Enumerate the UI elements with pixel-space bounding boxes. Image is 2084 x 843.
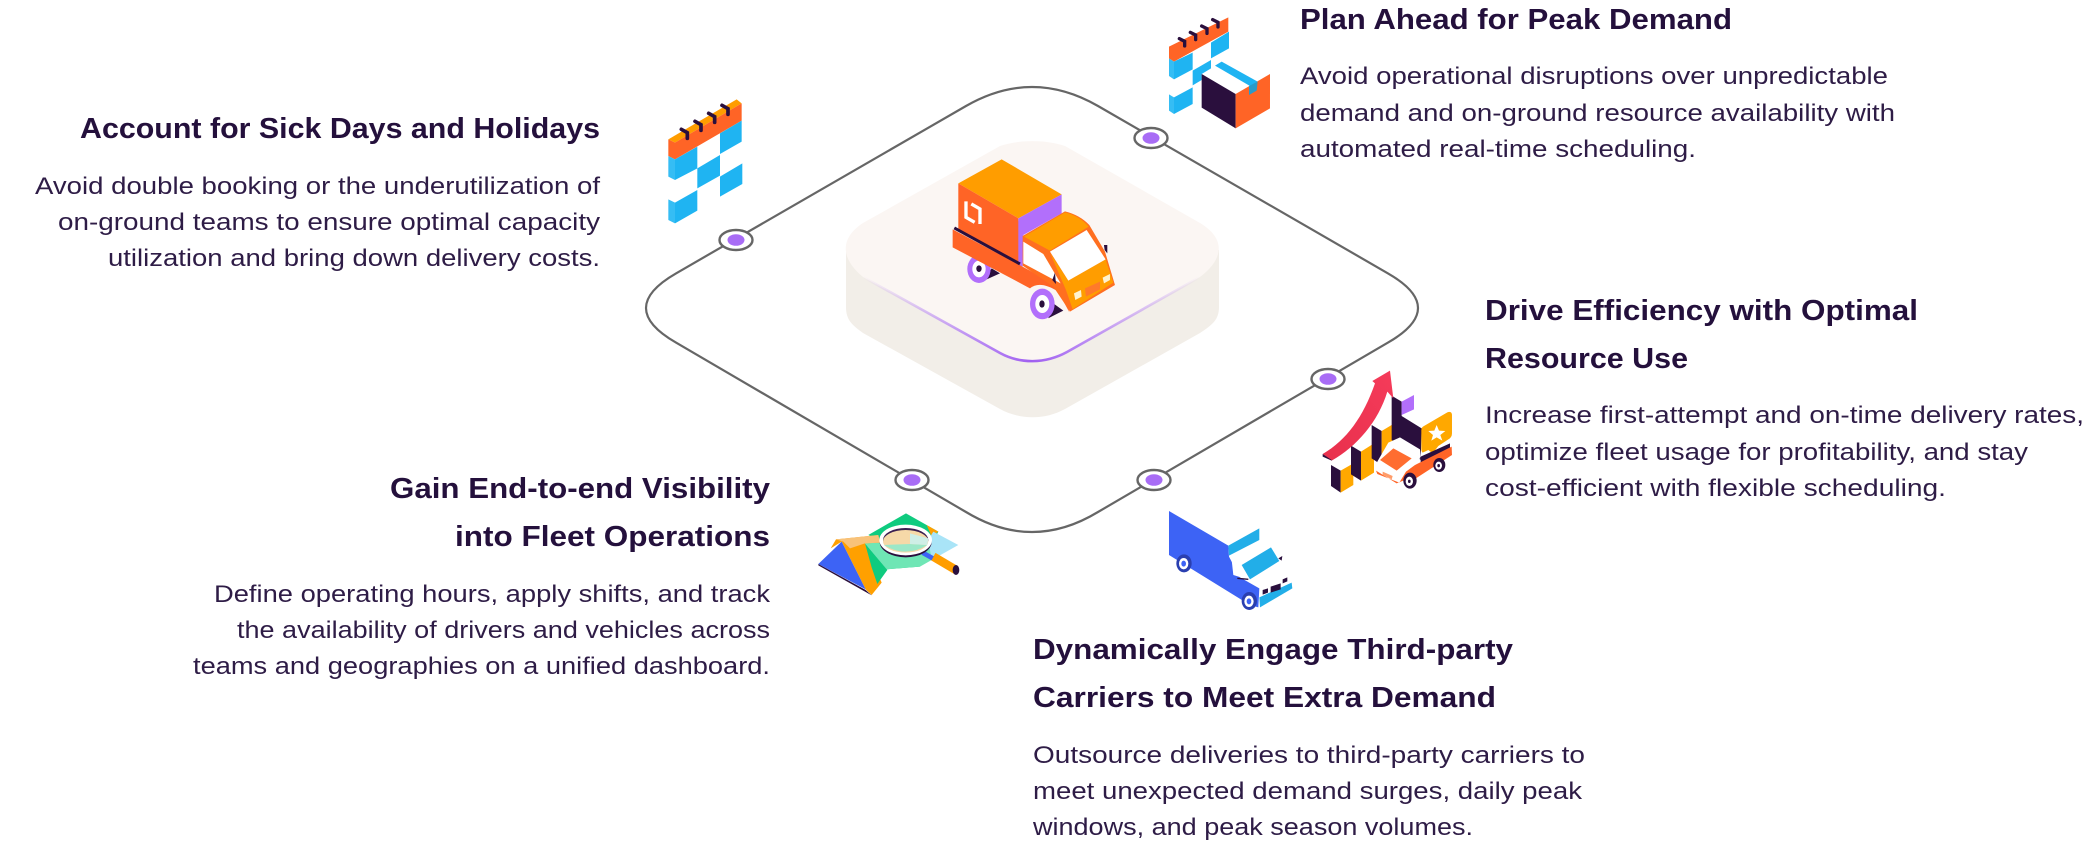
- body: optimize fleet usage for profitability, and stay: [1485, 439, 2029, 466]
- body: [193, 581, 771, 680]
- heading: [390, 473, 770, 553]
- icon: calendar and parcel: [1169, 17, 1270, 128]
- text block: Drive Efficiency with Optimal Resource Use: [1485, 295, 2084, 502]
- text block: Gain End-to-end Visibility into Fleet Operations: [193, 473, 771, 680]
- body: Avoid operational disruptions over unpredictable: [1300, 63, 1888, 90]
- body: [35, 173, 601, 272]
- heading: [1485, 295, 1918, 375]
- body: Avoid double booking or the underutilization of: [35, 173, 600, 200]
- text block: Plan Ahead for Peak Demand: [1300, 4, 1895, 163]
- heading: Account for Sick Days and Holidays: [80, 113, 600, 145]
- icon: map and magnifier: [818, 513, 959, 595]
- node: lower left: [896, 470, 928, 490]
- body: Increase first-attempt and on-time delivery rates,: [1485, 402, 2084, 429]
- body: the availability of drivers and vehicles across: [237, 617, 770, 644]
- heading: Carriers to Meet Extra Demand: [1033, 682, 1496, 714]
- body: on-ground teams to ensure optimal capacity: [58, 209, 601, 236]
- body: demand and on-ground resource availability with: [1300, 100, 1895, 127]
- central orange delivery truck: [953, 159, 1115, 319]
- icon: growth chart with truck: [1323, 371, 1452, 493]
- body: [1485, 402, 2084, 502]
- heading: Drive Efficiency with Optimal: [1485, 295, 1918, 327]
- body: [1300, 63, 1895, 163]
- body: windows, and peak season volumes.: [1032, 814, 1473, 841]
- text block: Dynamically Engage Third-party Carriers: [1032, 634, 1585, 841]
- body: meet unexpected demand surges, daily peak: [1033, 778, 1583, 805]
- icon: blue van: [1169, 511, 1292, 610]
- node: upper left: [720, 230, 752, 250]
- body: utilization and bring down delivery costs.: [108, 245, 600, 272]
- heading: Resource Use: [1485, 343, 1688, 375]
- icon: calendar: [668, 99, 742, 223]
- body: Define operating hours, apply shifts, and track: [214, 581, 771, 608]
- node: lower right: [1138, 470, 1170, 490]
- body: teams and geographies on a unified dashboard.: [193, 653, 770, 680]
- text block: Account for Sick Days and Holidays: [35, 113, 601, 272]
- body: cost-efficient with flexible scheduling.: [1485, 475, 1946, 502]
- central platform: [846, 141, 1219, 417]
- rounded diamond track: [646, 87, 1418, 532]
- heading: Dynamically Engage Third-party: [1033, 634, 1513, 666]
- heading: into Fleet Operations: [455, 521, 770, 553]
- heading: [1033, 634, 1513, 714]
- body: automated real-time scheduling.: [1300, 136, 1696, 163]
- body: Outsource deliveries to third-party carriers to: [1033, 742, 1585, 769]
- node: upper right: [1134, 128, 1168, 148]
- body: [1032, 742, 1585, 841]
- heading: Gain End-to-end Visibility: [390, 473, 770, 505]
- truck logo: [966, 201, 980, 224]
- node: right: [1312, 369, 1344, 389]
- heading: Plan Ahead for Peak Demand: [1300, 4, 1732, 36]
